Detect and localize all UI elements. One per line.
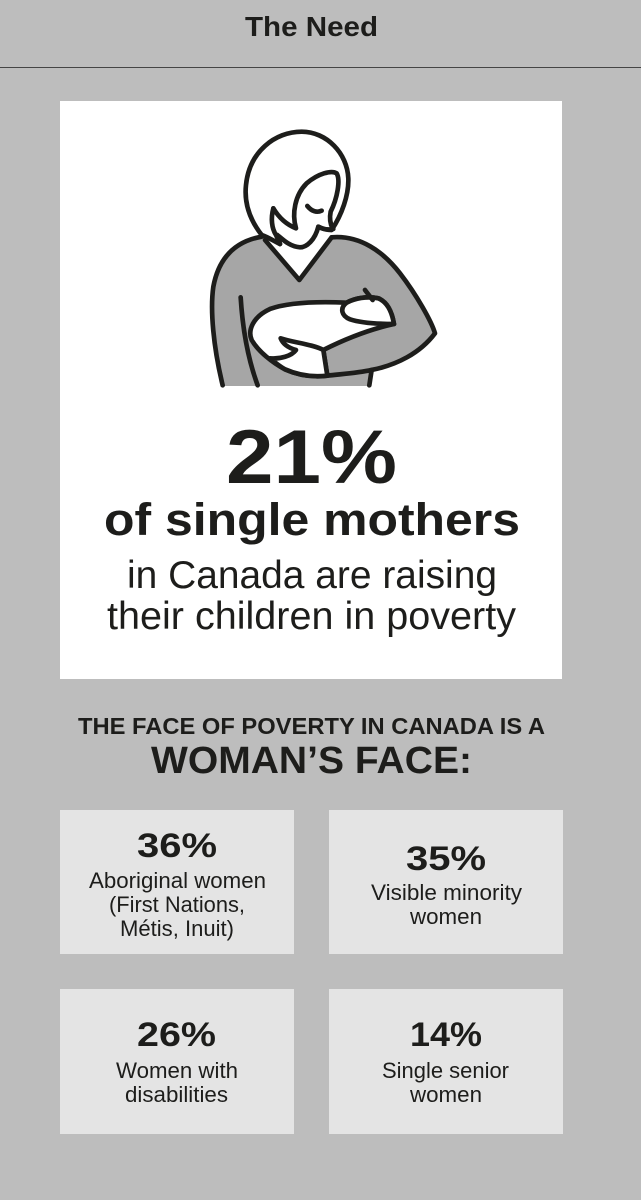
card: Women with disabilities: 26% (137, 1016, 216, 1054)
description: in Canada are raising (127, 554, 497, 597)
card: Visible minority women: Visible minority (371, 880, 522, 905)
card: Visible minority women: 35% (406, 840, 486, 878)
card: Women with disabilities: Women with (116, 1058, 238, 1083)
section heading (78, 713, 545, 782)
icon: mother holding baby (212, 132, 435, 386)
card: Women with disabilities (60, 989, 294, 1134)
section heading: THE FACE OF POVERTY IN CANADA IS A (78, 713, 545, 739)
title: The Need (245, 11, 378, 42)
card: Aboriginal women (60, 810, 294, 954)
card: Aboriginal women: 36% (137, 827, 217, 865)
card: Visible minority women (329, 810, 563, 954)
card: Women with disabilities: disabilities (125, 1082, 228, 1107)
card: Single senior women: 14% (410, 1016, 482, 1054)
card: Single senior women: women (409, 1082, 482, 1107)
panel: single mothers (60, 101, 562, 679)
section heading: WOMAN’S FACE: (151, 740, 472, 782)
card: Single senior women (329, 989, 563, 1134)
big statistic: 21% (226, 415, 397, 500)
description: their children in poverty (107, 595, 517, 638)
description (107, 554, 517, 638)
card: Aboriginal women: Aboriginal women (89, 868, 266, 893)
card: Single senior women: Single senior (382, 1058, 509, 1083)
card: Aboriginal women: Métis, Inuit) (120, 916, 234, 941)
card: Aboriginal women: (First Nations, (109, 892, 245, 917)
subject: of single mothers (104, 494, 520, 545)
card: Visible minority women: women (409, 904, 482, 929)
